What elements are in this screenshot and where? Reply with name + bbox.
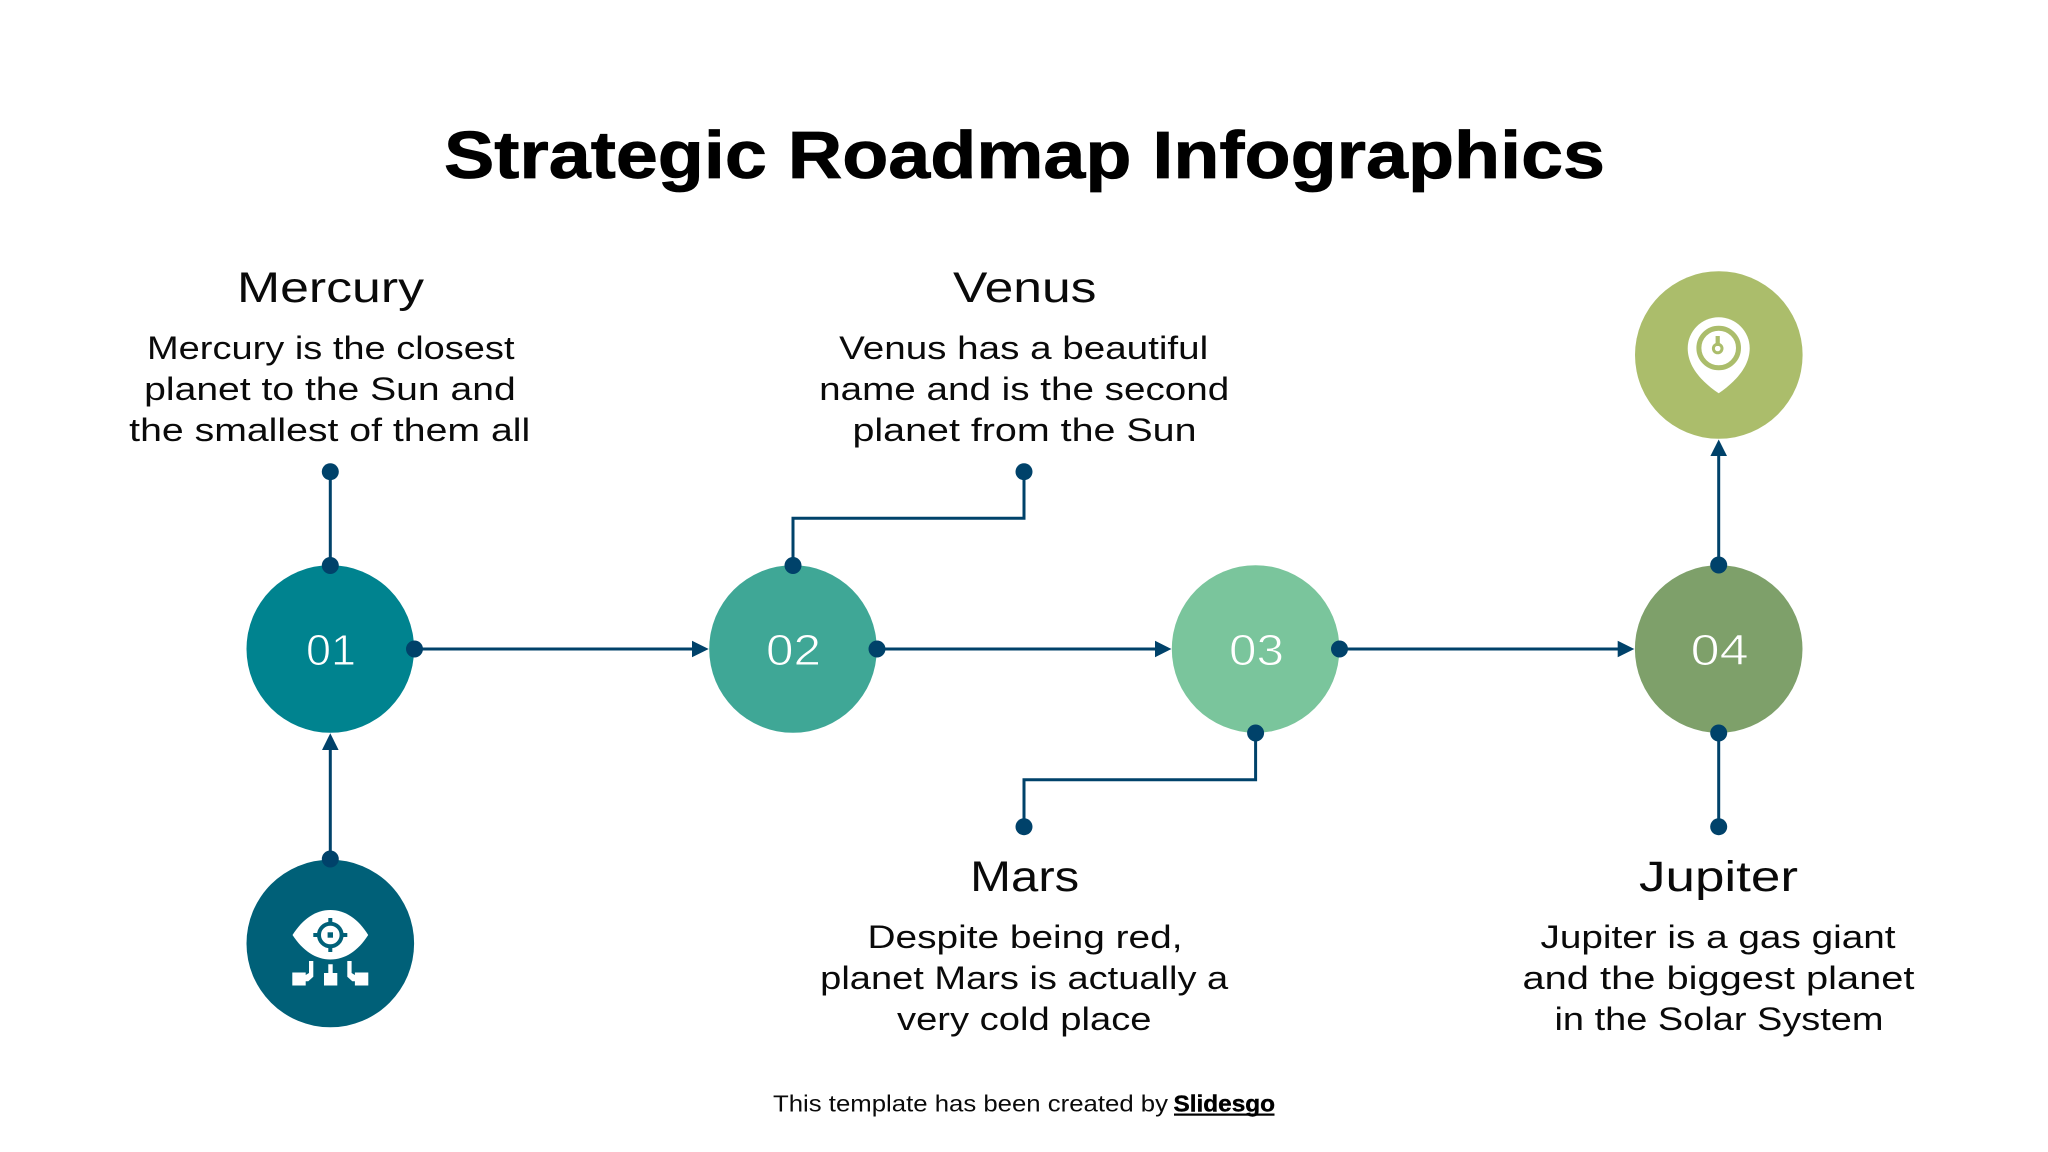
description: Mars bbox=[820, 919, 1228, 1037]
description: Jupiter: Jupiter is a gas giant bbox=[1540, 919, 1896, 955]
description: Mars: very cold place bbox=[897, 1001, 1152, 1037]
circle 04: 04 bbox=[1691, 626, 1749, 675]
circle 04 bbox=[1635, 565, 1802, 733]
circle 01: 01 bbox=[306, 626, 356, 675]
arrow: circle 04 to pin icon bbox=[1710, 440, 1727, 574]
circle 03: 03 bbox=[1229, 626, 1284, 675]
description: Venus: planet from the Sun bbox=[852, 412, 1196, 448]
title: Strategic Roadmap Infographics bbox=[444, 118, 1605, 193]
heading: Venus: Venus bbox=[953, 264, 1096, 312]
description: Mercury: the smallest of them all bbox=[129, 412, 530, 448]
footer credit: Slidesgo bbox=[1174, 1090, 1275, 1116]
connector: circle 04 to Jupiter bbox=[1710, 724, 1727, 835]
connector: circle 01 to Mercury bbox=[322, 463, 339, 574]
description: Venus bbox=[819, 330, 1229, 448]
connector: circle 03 to Mars bbox=[1016, 724, 1264, 835]
arrow: circle 01 to circle 02 bbox=[406, 640, 709, 658]
heading: Mercury: Mercury bbox=[237, 264, 425, 312]
text block: Venus bbox=[819, 264, 1229, 448]
circle 02 bbox=[709, 565, 877, 733]
icon: location pin with dial bbox=[1635, 271, 1803, 439]
heading: Mars: Mars bbox=[970, 853, 1079, 901]
icon: eye with target and circuit bbox=[246, 860, 414, 1027]
description: Mercury bbox=[129, 330, 530, 448]
description: Jupiter bbox=[1522, 919, 1915, 1037]
arrow: circle 02 to circle 03 bbox=[868, 640, 1171, 658]
heading: Jupiter: Jupiter bbox=[1639, 853, 1798, 901]
circle 01 bbox=[246, 565, 414, 733]
description: Jupiter: and the biggest planet bbox=[1522, 960, 1915, 996]
arrow: icon to circle 01 bbox=[322, 733, 339, 868]
circle 03 bbox=[1172, 565, 1339, 733]
description: Venus: Venus has a beautiful bbox=[839, 330, 1208, 366]
arrow: circle 03 to circle 04 bbox=[1331, 640, 1634, 658]
text block: Jupiter bbox=[1522, 853, 1915, 1037]
circle 02: 02 bbox=[766, 626, 821, 675]
description: Mars: planet Mars is actually a bbox=[820, 960, 1228, 996]
description: Mars: Despite being red, bbox=[868, 919, 1182, 955]
description: Mercury: Mercury is the closest bbox=[147, 330, 515, 366]
text block: Mercury bbox=[129, 264, 530, 448]
description: Jupiter: in the Solar System bbox=[1554, 1001, 1884, 1037]
description: Mercury: planet to the Sun and bbox=[144, 371, 516, 407]
connector: circle 02 to Venus bbox=[784, 463, 1032, 574]
footer credit: This template has been created by bbox=[773, 1090, 1169, 1116]
text block: Mars bbox=[820, 853, 1228, 1037]
description: Venus: name and is the second bbox=[819, 371, 1229, 407]
